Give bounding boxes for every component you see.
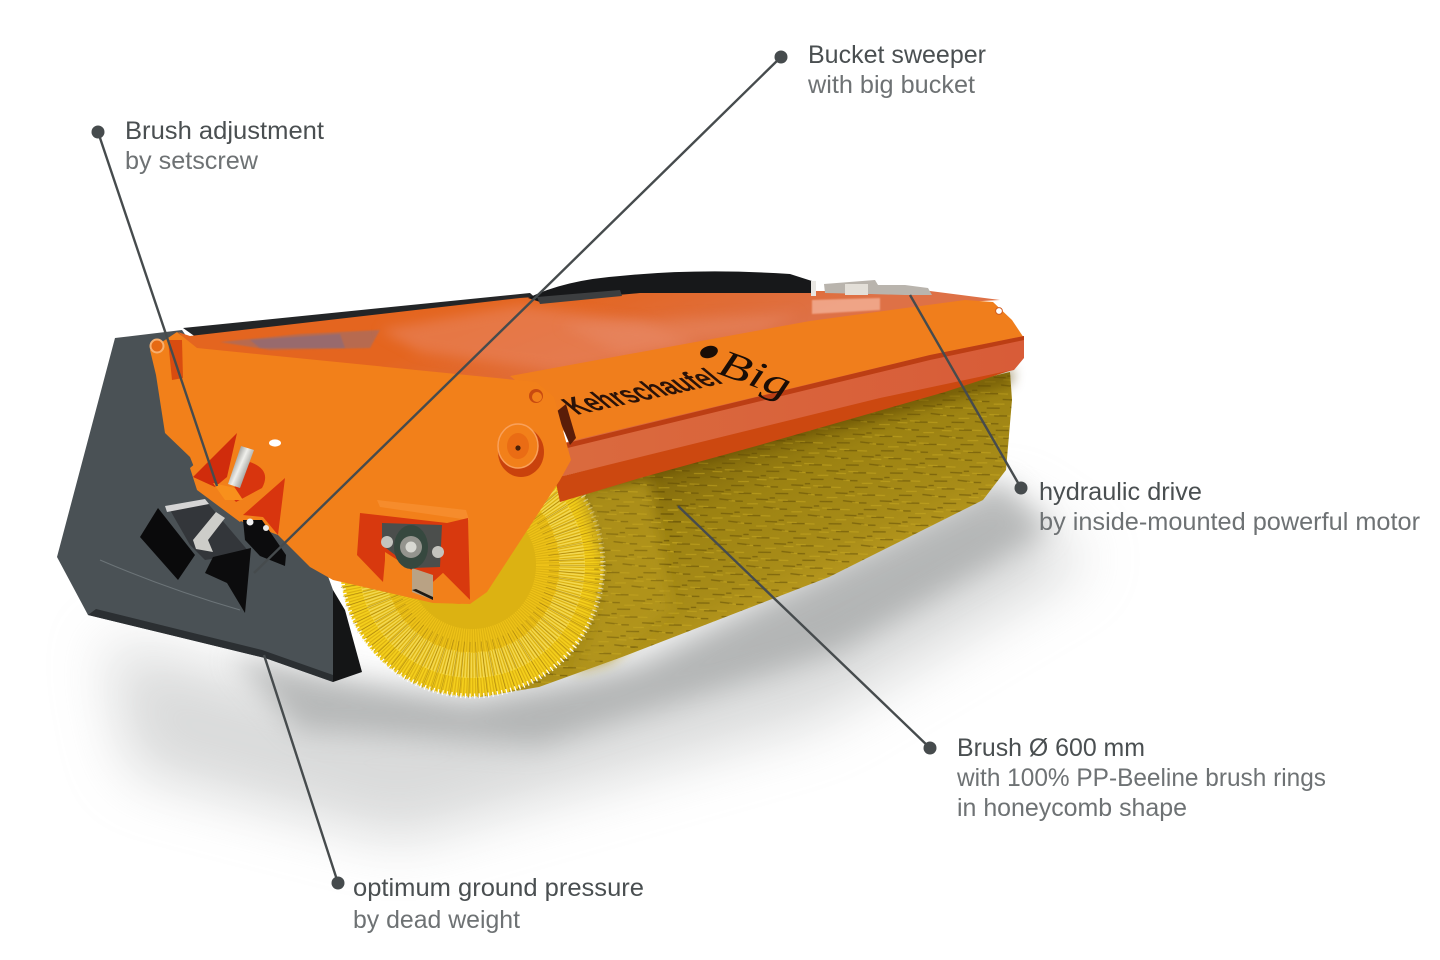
setscrew bracket: [140, 428, 287, 613]
callout: brush diameter: with 100% PP-Beeline brush rings: [956, 764, 1326, 792]
callout: brush diameter: in honeycomb shape: [957, 794, 1187, 822]
callout: bucket sweeper: [807, 41, 986, 99]
product photo: bucket sweeper: [57, 271, 1024, 697]
ground shadow: [105, 480, 1090, 840]
leader line: ground pressure: [264, 655, 344, 890]
logo: Kehrschaufel Big: Kehrschaufel: [553, 363, 731, 420]
hydraulic hose: [528, 271, 932, 304]
bearing bracket: [357, 500, 470, 604]
callout: brush diameter: Brush Ø 600 mm: [957, 734, 1145, 762]
leader line: brush adjustment: [92, 126, 217, 486]
rear rubber strip: [183, 293, 540, 340]
long front panel: [510, 300, 1024, 502]
leader line: brush diameter: [678, 506, 936, 754]
callout: brush adjustment: Brush adjustment: [125, 117, 324, 145]
brush end bristles: [341, 434, 603, 696]
callout: brush adjustment: [125, 117, 324, 175]
logo: Kehrschaufel Big: [553, 342, 797, 420]
callout: ground pressure: optimum ground pressure: [353, 874, 644, 902]
callout: hydraulic drive: by inside-mounted powerful motor: [1039, 508, 1420, 536]
callout: brush diameter: [956, 734, 1326, 822]
callout: hydraulic drive: [1039, 478, 1420, 536]
callout: bucket sweeper: with big bucket: [807, 71, 975, 99]
leader line: hydraulic drive: [910, 295, 1028, 494]
bucket side wall: [57, 330, 362, 682]
leader line: bucket sweeper: [254, 50, 788, 573]
callout: ground pressure: [353, 874, 644, 934]
pivot boss: [498, 424, 544, 477]
top panel of housing: [178, 291, 1000, 385]
logo: Kehrschaufel Big: Big: [713, 342, 797, 407]
callout: hydraulic drive: hydraulic drive: [1039, 478, 1202, 506]
brush cylinder: [341, 368, 1014, 697]
orange side plate: [150, 332, 571, 604]
callout: bucket sweeper: Bucket sweeper: [808, 41, 986, 69]
callout: ground pressure: by dead weight: [353, 906, 520, 934]
callout: brush adjustment: by setscrew: [125, 147, 259, 175]
